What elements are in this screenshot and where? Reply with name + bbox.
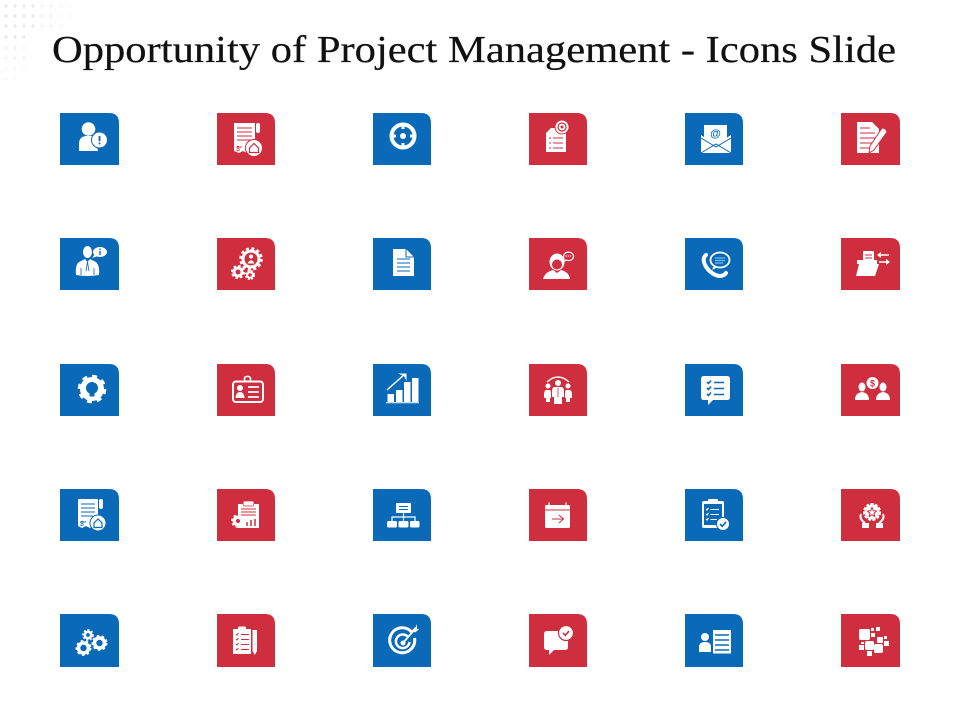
icon: id badge — [217, 364, 275, 416]
icon: receipt with house (blue): $ — [80, 521, 84, 528]
icon: org hierarchy — [373, 489, 431, 541]
icon: email envelope — [685, 113, 743, 165]
icon: clipboard and pencil — [217, 614, 275, 667]
icon: receipt with house (blue) — [60, 489, 119, 541]
icon: clipboard checklist approved — [685, 489, 743, 541]
icon: hands holding star badge — [841, 489, 900, 541]
icon: gears with person — [217, 238, 275, 290]
icon: clipboard with gear and bars — [217, 489, 275, 541]
icon: growth bar chart — [373, 364, 431, 416]
icon: calendar with arrow — [529, 489, 587, 541]
icon: person profile list — [685, 614, 743, 667]
title: Opportunity of Project Management - Icons Slide — [52, 29, 896, 71]
icon: crosshair — [373, 113, 431, 165]
icon: chat checklist — [685, 364, 743, 416]
icon: receipt with house — [217, 113, 275, 165]
icon: folder with arrows — [841, 238, 900, 290]
icon: gear with bulb — [60, 364, 119, 416]
icon: email envelope: @ — [710, 128, 721, 140]
icon: scattered squares — [841, 614, 900, 667]
icon: receipt with house: $ — [236, 146, 240, 153]
icon: businessman with info bubble — [60, 238, 119, 290]
icon: two people and dollar: $ — [870, 378, 875, 388]
icon: team of three — [529, 364, 587, 416]
icon: three gears — [60, 614, 119, 667]
icon: document and pen — [841, 113, 900, 165]
icon: target with dart — [373, 614, 431, 667]
icon: two people and dollar — [841, 364, 900, 416]
icon: text document — [373, 238, 431, 290]
icon: user alert — [60, 113, 119, 165]
icon: phone and chat — [685, 238, 743, 290]
icon: chat bubble with check — [529, 614, 587, 667]
icon: person speaking — [529, 238, 587, 290]
icon: document with target — [529, 113, 587, 165]
decorative dot pattern — [4, 4, 71, 80]
